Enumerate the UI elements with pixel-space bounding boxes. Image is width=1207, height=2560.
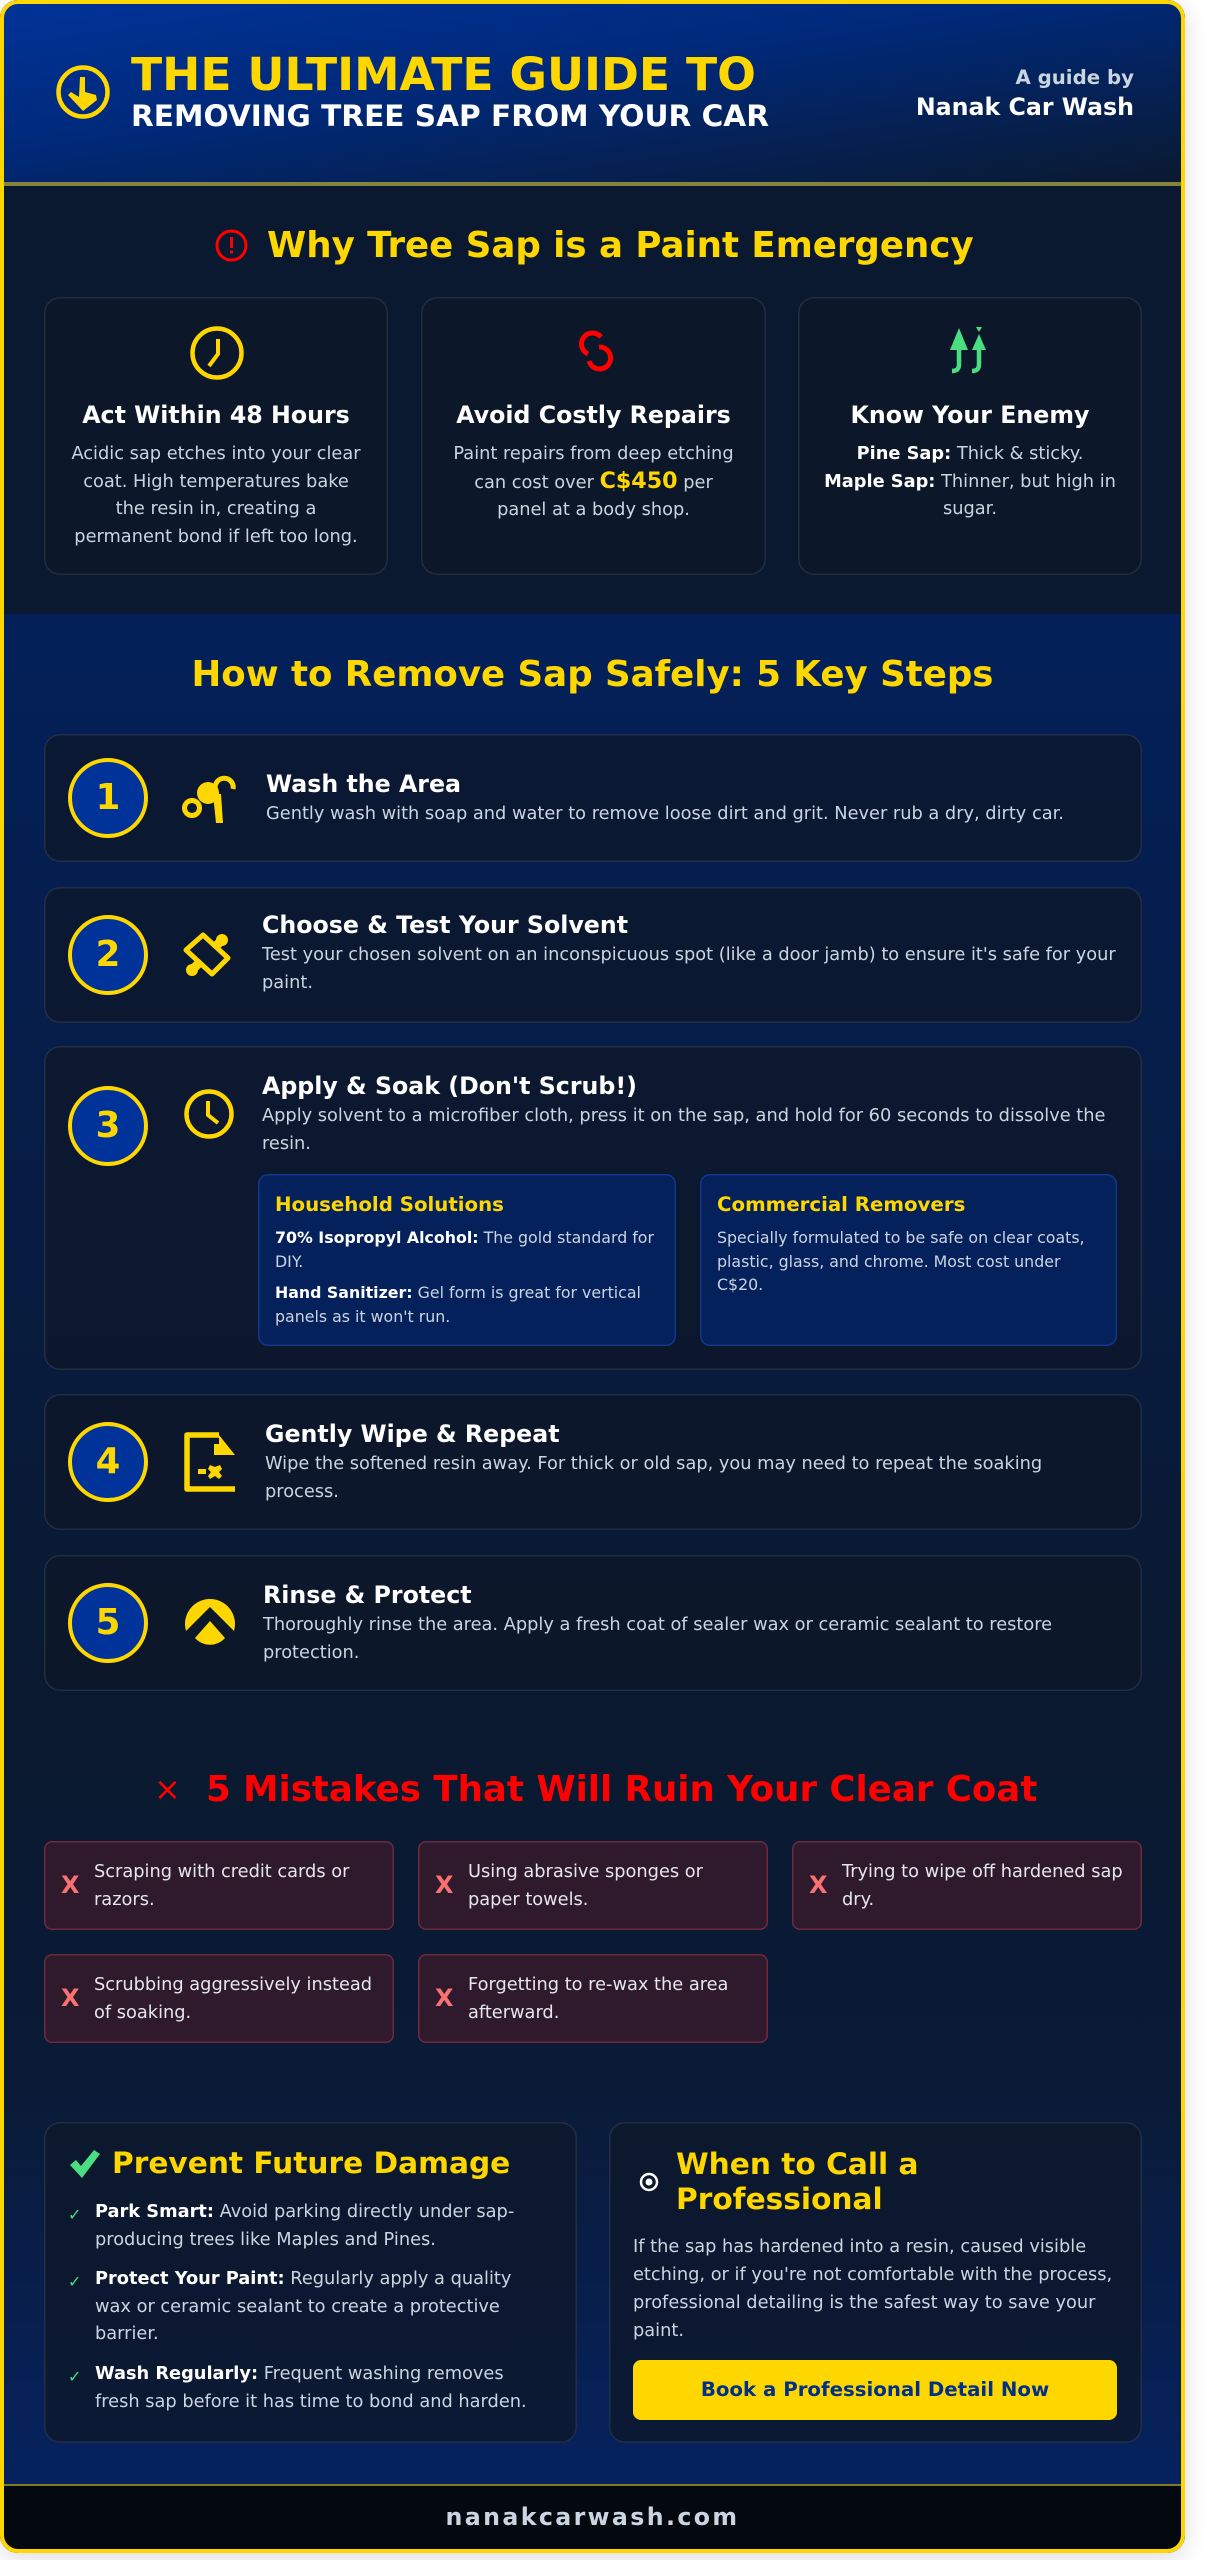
icon: eraser cross	[184, 932, 230, 976]
card: avoid costly repairs	[421, 297, 766, 575]
icon: green check	[70, 2150, 100, 2178]
heading: Why Tree Sap is a Paint Emergency	[267, 225, 974, 266]
step number	[68, 758, 148, 838]
mistake text: dry.	[842, 1888, 874, 1910]
sub-panel text: DIY.	[275, 1252, 303, 1270]
sub-panel: commercial removers	[700, 1174, 1117, 1346]
card: act within 48 hours	[44, 297, 388, 575]
card text: Paint repairs from deep etching	[453, 443, 734, 464]
mistake text	[468, 1974, 728, 2022]
step title: Gently Wipe & Repeat	[265, 1420, 560, 1448]
step number	[68, 1086, 148, 1166]
heading: How to Remove Sap Safely: 5 Key Steps	[192, 654, 994, 695]
step description: protection.	[263, 1642, 359, 1663]
section: five steps	[0, 614, 1185, 1714]
panel: when to call a professional	[609, 2122, 1142, 2443]
sub-panel text: 70% Isopropyl Alcohol: The gold standard for	[275, 1228, 654, 1247]
heading: Professional	[676, 2181, 883, 2216]
step description: paint.	[262, 972, 313, 993]
tip text	[95, 2268, 511, 2344]
step description	[262, 1614, 1052, 1663]
card text	[71, 443, 361, 547]
icon: clock	[190, 326, 244, 380]
tip: protect your paint: ✓	[68, 2272, 81, 2291]
card text: sugar.	[943, 498, 997, 519]
body text: professional detailing is the safest way to save your	[633, 2292, 1095, 2313]
card text: coat. High temperatures bake	[83, 471, 349, 492]
card heading: Know Your Enemy	[851, 401, 1089, 429]
sub-panel text: C$20.	[717, 1275, 763, 1294]
tip text: producing trees like Maples and Pines.	[95, 2229, 436, 2250]
x mark: X	[61, 1871, 80, 1899]
card: know your enemy	[798, 297, 1142, 575]
icon: green arrows	[950, 327, 986, 374]
card heading: Avoid Costly Repairs	[456, 401, 731, 429]
body text: paint.	[633, 2320, 684, 2341]
tip: wash regularly: ✓	[68, 2367, 81, 2386]
step description: Apply solvent to a microfiber cloth, press it on the sap, and hold for 60 seconds to dissolve the	[262, 1105, 1105, 1126]
tip text: barrier.	[95, 2323, 159, 2344]
card heading: Act Within 48 Hours	[82, 401, 350, 429]
icon: bullseye	[640, 2172, 658, 2192]
heading: When to Call a	[676, 2146, 918, 2181]
card text: Maple Sap: Thinner, but high in	[824, 471, 1116, 492]
mistake text	[94, 1861, 350, 1910]
panel: prevent future damage	[44, 2122, 577, 2443]
section: mistakes	[44, 1769, 1142, 2043]
step title: Apply & Soak (Don't Scrub!)	[262, 1072, 637, 1100]
tip text: Protect Your Paint: Regularly apply a quality	[95, 2268, 511, 2289]
footer	[0, 2484, 1185, 2553]
mistake text: Scrubbing aggressively instead	[94, 1974, 372, 1995]
step 2	[44, 887, 1142, 1023]
x mark: X	[435, 1871, 454, 1899]
tip text	[95, 2201, 514, 2250]
icon: red cross: ×	[154, 1770, 181, 1808]
card text: panel at a body shop.	[497, 499, 690, 520]
step description: process.	[265, 1481, 339, 1502]
icon: keys	[182, 776, 236, 823]
mistake 1	[44, 1841, 394, 1930]
icon: hand pointing down	[56, 65, 110, 119]
step description	[265, 1453, 1042, 1502]
tip text: Wash Regularly: Frequent washing removes	[95, 2363, 504, 2384]
section lower background	[0, 1714, 1185, 2484]
step description: Wipe the softened resin away. For thick or old sap, you may need to repeat the soaking	[265, 1453, 1042, 1474]
sub-panel text: Hand Sanitizer: Gel form is great for vertical	[275, 1283, 641, 1302]
sub-panel text: panels as it won't run.	[275, 1306, 450, 1326]
sub-panel text: plastic, glass, and chrome. Most cost under	[717, 1252, 1060, 1270]
gold divider	[0, 182, 1185, 186]
sub-panel: household solutions	[258, 1174, 676, 1346]
card text: Acidic sap etches into your clear	[71, 443, 361, 464]
sub-panel text	[275, 1283, 641, 1326]
step 3	[44, 1046, 1142, 1370]
tip: park smart: ✓	[68, 2205, 81, 2224]
step description: resin.	[262, 1133, 311, 1154]
mistake text	[842, 1861, 1123, 1910]
sub-panel text	[717, 1228, 1085, 1294]
step 4	[44, 1394, 1142, 1530]
step title: Wash the Area	[266, 770, 461, 798]
mistake text: of soaking.	[94, 2002, 191, 2022]
sub-panel heading: Commercial Removers	[717, 1193, 965, 1216]
heading	[676, 2146, 918, 2216]
byline: Nanak Car Wash	[916, 93, 1134, 121]
step number	[68, 1422, 148, 1502]
step number	[68, 1583, 148, 1663]
step description	[262, 1105, 1105, 1154]
icon: broken link	[578, 330, 614, 372]
step number: 3	[96, 1105, 120, 1146]
icon: clock	[184, 1089, 234, 1139]
card text	[453, 443, 734, 520]
mistake text	[94, 1974, 372, 2022]
step 5	[44, 1555, 1142, 1691]
x mark: X	[809, 1871, 828, 1899]
sub-panel text	[275, 1228, 654, 1270]
icon: red alert	[216, 230, 248, 262]
button	[633, 2360, 1117, 2420]
icon: document	[184, 1432, 235, 1492]
mistake 3	[792, 1841, 1142, 1930]
body text: etching, or if you're not comfortable with the process,	[633, 2264, 1112, 2285]
step 1	[44, 734, 1142, 862]
step title: Rinse & Protect	[263, 1581, 472, 1609]
section: why sap is an emergency	[0, 186, 1185, 614]
mistake 4	[44, 1954, 394, 2043]
tip text	[95, 2363, 527, 2412]
byline: A guide by	[1015, 66, 1134, 89]
mistake text: Scraping with credit cards or	[94, 1861, 349, 1882]
step title: Choose & Test Your Solvent	[262, 911, 628, 939]
mistake text: Forgetting to re-wax the area	[468, 1974, 728, 1995]
mistake text: razors.	[94, 1888, 155, 1910]
body text	[633, 2236, 1112, 2341]
mistake text: paper towels.	[468, 1888, 588, 1910]
tip text: Park Smart: Avoid parking directly under sap-	[95, 2201, 514, 2222]
mistake text: afterward.	[468, 2002, 559, 2022]
mistake text	[468, 1861, 703, 1910]
title: THE ULTIMATE GUIDE TO	[131, 48, 756, 101]
footer url: nanakcarwash.com	[446, 2503, 739, 2531]
sub-panel text: Specially formulated to be safe on clear coats,	[717, 1228, 1085, 1247]
step number	[68, 915, 148, 995]
header band	[0, 0, 1185, 186]
step description: Gently wash with soap and water to remove loose dirt and grit. Never rub a dry, dirty car.	[266, 803, 1064, 824]
step number: 2	[96, 934, 120, 975]
subtitle: REMOVING TREE SAP FROM YOUR CAR	[131, 99, 769, 133]
mistake text: Using abrasive sponges or	[468, 1861, 703, 1882]
step number: 5	[96, 1602, 120, 1643]
step number: 4	[96, 1441, 120, 1482]
card text: Pine Sap: Thick & sticky.	[857, 443, 1083, 464]
icon: shield chevron	[185, 1599, 235, 1645]
x mark: X	[435, 1984, 454, 2012]
step number: 1	[96, 777, 120, 818]
card text: permanent bond if left too long.	[74, 526, 358, 547]
mistake text: Trying to wipe off hardened sap	[842, 1861, 1123, 1882]
heading: 5 Mistakes That Will Ruin Your Clear Coat	[206, 1769, 1037, 1810]
byline	[916, 66, 1134, 121]
mistake 2	[418, 1841, 768, 1930]
tip text: wax or ceramic sealant to create a protective	[95, 2296, 500, 2317]
sub-panel heading: Household Solutions	[275, 1193, 504, 1216]
card text	[824, 443, 1116, 519]
button: Book a Professional Detail Now	[701, 2378, 1049, 2401]
step description: Thoroughly rinse the area. Apply a fresh coat of sealer wax or ceramic sealant to restore	[263, 1614, 1052, 1635]
heading: Prevent Future Damage	[112, 2145, 510, 2180]
step description	[262, 944, 1116, 993]
card text: the resin in, creating a	[116, 498, 316, 519]
mistake 5	[418, 1954, 768, 2043]
tip text: fresh sap before it has time to bond and harden.	[95, 2391, 527, 2412]
step description: Test your chosen solvent on an inconspicuous spot (like a door jamb) to ensure it's safe for your	[262, 944, 1116, 965]
body text: If the sap has hardened into a resin, caused visible	[633, 2236, 1086, 2257]
card text: can cost over C$450 per	[474, 468, 713, 494]
x mark: X	[61, 1984, 80, 2012]
